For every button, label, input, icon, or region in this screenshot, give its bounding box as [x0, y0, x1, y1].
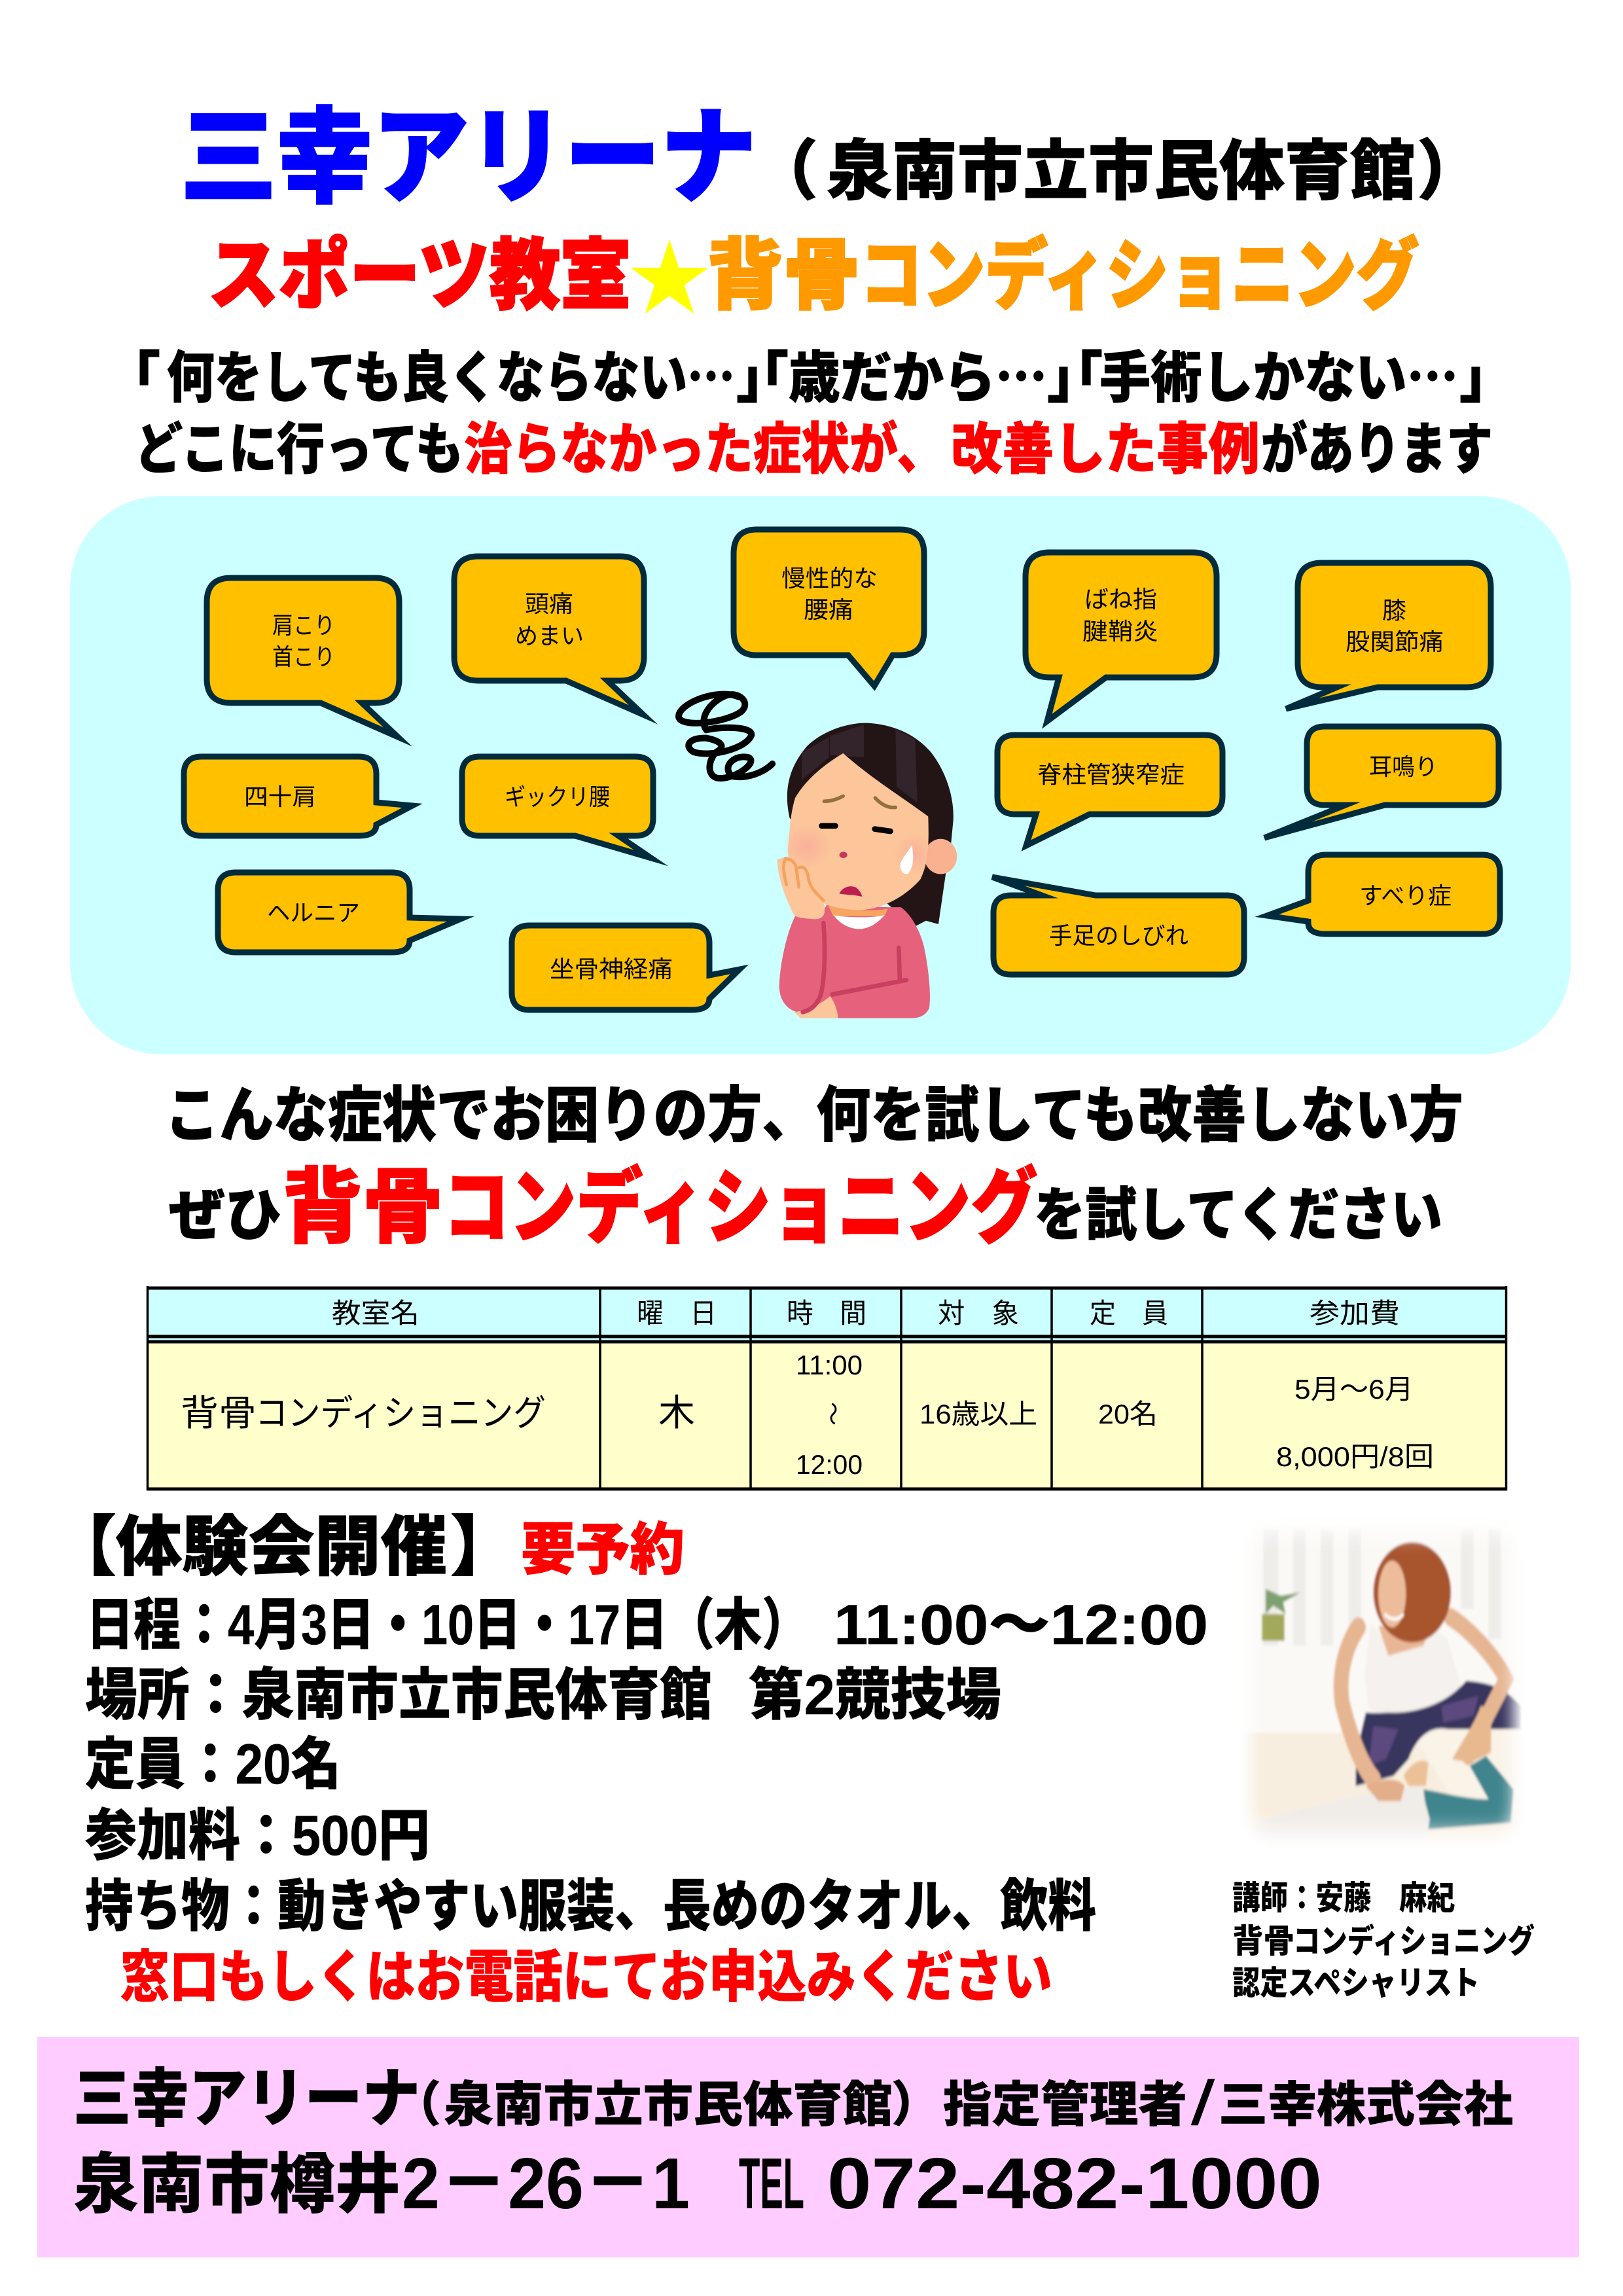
callout: frozen shoulder — [184, 757, 412, 836]
callout: sciatica — [512, 925, 740, 1010]
tag: reservation required: 要予約 — [521, 1518, 685, 1581]
icon: scribble of worry — [679, 694, 772, 778]
nose — [840, 852, 847, 858]
body values: 背骨 — [181, 1393, 257, 1433]
callout: chronic back pain: 腰痛 — [804, 596, 853, 623]
subtitle: course name: 背骨 — [707, 233, 860, 319]
callout: spondylolisthesis — [1267, 855, 1500, 934]
footer background — [37, 2037, 1579, 2257]
title: venue name: 三幸アリーナ — [181, 99, 757, 216]
instructor title line 1 — [1232, 1923, 1535, 1960]
table vertical rules — [148, 1286, 1507, 1490]
client bare foot — [1403, 1761, 1429, 1786]
place line: 第2競技場 — [749, 1664, 1001, 1727]
footer line 1: 指定管理者 — [943, 2077, 1187, 2132]
hand on cheek — [777, 857, 825, 919]
body values: 12:00 — [796, 1449, 863, 1480]
title: venue descriptor: 泉南市立市民体育館 — [827, 135, 1416, 208]
leggings — [1355, 1681, 1521, 1786]
arm left — [1341, 1627, 1374, 1780]
table body row — [147, 1342, 1507, 1489]
plant leaves — [1266, 1589, 1301, 1614]
intro line 2: どこに行っても — [135, 404, 463, 485]
callout: strained back — [462, 757, 653, 858]
hair — [1374, 1542, 1451, 1642]
callout: knee and hip joint pain: 股関節痛 — [1346, 628, 1444, 655]
place line: 場所：泉南市立市民体育館 — [85, 1664, 712, 1727]
footer line 1: / — [1191, 2068, 1215, 2138]
date line: 日程：4月3日・10日・17日（木） — [86, 1594, 809, 1657]
recommendation line 2: を試してください — [1034, 1169, 1442, 1252]
intro text — [105, 333, 1515, 485]
callout: frozen shoulder: 四十肩 — [244, 783, 316, 810]
intro line 1: 手術しかない… — [1099, 333, 1458, 414]
eyes — [821, 826, 891, 831]
footer line 2: TEL — [739, 2144, 804, 2224]
fee line: 参加料：500円 — [85, 1804, 430, 1867]
intro line 2 — [135, 404, 1493, 485]
panel: symptoms — [70, 496, 1571, 1054]
callout: numbness in limbs — [992, 877, 1244, 975]
heading: trial session: 【 — [51, 1511, 116, 1584]
footer line 1: 三幸アリーナ — [73, 2062, 420, 2134]
instructor title line 1: 背骨 — [1232, 1923, 1294, 1960]
instructor title line 2: 認定スペシャリスト — [1232, 1965, 1480, 2001]
intro line 2: 治らなかった症状が、 — [464, 404, 945, 485]
body values: ～ — [819, 1402, 846, 1426]
footer line 2: 泉南市樽井 — [73, 2148, 401, 2221]
neck — [828, 905, 888, 916]
intro line 2: があります — [1261, 404, 1493, 485]
callout: chronic back pain: 慢性的な — [781, 565, 878, 592]
collar — [834, 915, 885, 929]
callout: tinnitus: 耳鳴り — [1369, 753, 1438, 780]
heading: trial session: 体験会開催 — [116, 1511, 447, 1584]
couch — [1419, 1728, 1508, 1799]
header labels: 参加費 — [1310, 1298, 1400, 1329]
subtitle — [208, 233, 1419, 325]
body values — [181, 1350, 1434, 1480]
callout: hernia: ヘルニア — [267, 899, 360, 926]
intro line 1: 「 — [105, 333, 160, 414]
body values: 16歳以上 — [919, 1399, 1037, 1429]
footer line 2 — [73, 2144, 1322, 2224]
leggings highlights — [1368, 1696, 1478, 1766]
neck — [1378, 1626, 1429, 1656]
mouth — [840, 886, 862, 897]
client foot — [1452, 1706, 1491, 1763]
body values: 木 — [658, 1392, 695, 1433]
face — [788, 753, 929, 910]
callout: trigger finger and tenosynovitis: 腱鞘炎 — [1082, 618, 1158, 645]
callout: headache and dizziness: 頭痛 — [525, 590, 573, 617]
callout: shoulder and neck stiffness — [207, 578, 399, 737]
callout: spinal stenosis: 脊柱管狭窄症 — [1037, 761, 1185, 788]
intro line 1: 」 — [1047, 333, 1103, 414]
body values: 8,000円/8回 — [1276, 1441, 1434, 1472]
floor — [1248, 1732, 1510, 1837]
callout: numbness in limbs: 手足のしびれ — [1049, 922, 1188, 949]
callout: strained back: ギックリ腰 — [505, 783, 610, 810]
intro line 1: 「 — [1047, 333, 1103, 414]
intro line 1: 歳だから… — [789, 333, 1047, 414]
footer line 1: （ — [393, 2077, 441, 2132]
intro line 1 — [105, 333, 1515, 414]
schedule table — [147, 1286, 1507, 1490]
subtitle: course name: コンディショニング — [860, 233, 1419, 319]
body values: コンディショニング — [255, 1393, 546, 1433]
callout: chronic back pain — [734, 529, 924, 686]
callout: knee and hip joint pain — [1286, 563, 1491, 709]
recommendation text — [165, 1067, 1463, 1259]
sweater — [779, 905, 930, 1018]
callout: tinnitus — [1264, 726, 1499, 838]
callout: spondylolisthesis: すべり症 — [1359, 882, 1452, 909]
callout: spinal stenosis — [997, 735, 1222, 846]
callout: headache and dizziness: めまい — [515, 622, 584, 649]
table header row — [147, 1288, 1507, 1336]
callout: shoulder and neck stiffness: 肩こり — [272, 612, 335, 639]
footer line 2: 2－26－1 — [402, 2144, 690, 2224]
callout: trigger finger and tenosynovitis — [1026, 552, 1217, 721]
client teal leg — [1423, 1756, 1514, 1829]
recommendation line 2: ぜひ — [169, 1169, 281, 1252]
callout: shoulder and neck stiffness: 首こり — [272, 643, 335, 670]
smile — [1385, 1614, 1403, 1619]
title: venue descriptor: ） — [1417, 135, 1482, 208]
finger lines — [783, 859, 823, 901]
icon: star: ★ — [628, 234, 711, 325]
hair — [787, 723, 954, 926]
intro line 2: 改善した事例 — [951, 404, 1260, 485]
heading: trial session: 】 — [450, 1511, 516, 1584]
tear — [901, 845, 913, 874]
face — [1378, 1560, 1406, 1627]
header labels — [332, 1298, 1400, 1329]
recommendation line 2 — [169, 1141, 1442, 1259]
ear — [924, 839, 957, 874]
footer line 1 — [73, 2062, 1513, 2138]
body values: 11:00 — [796, 1350, 863, 1380]
trial session details — [51, 1511, 1208, 2009]
subtitle: sports class: スポーツ教室 — [208, 233, 631, 319]
eyebrows — [824, 796, 895, 808]
table outer and column rules — [147, 1288, 1507, 1489]
application note: 窓口もしくはお電話にてお申込みください — [120, 1946, 1052, 2009]
recommendation line 1: こんな症状でお困りの方、何を試しても改善しない方 — [165, 1067, 1463, 1154]
footer line 1: 泉南市立市民体育館 — [444, 2077, 893, 2132]
header labels: 教室名 — [332, 1298, 419, 1329]
intro line 1: 」 — [1459, 333, 1515, 414]
date line: 11:00～12:00 — [834, 1594, 1208, 1657]
recommendation line 2: 背骨 — [282, 1141, 443, 1259]
instructor hand on client — [1366, 1780, 1404, 1801]
instructor name: 講師：安藤 麻紀 — [1232, 1880, 1455, 1916]
header labels: 対 象 — [938, 1298, 1019, 1329]
instructor caption — [1232, 1880, 1535, 2001]
callout: knee and hip joint pain: 膝 — [1382, 597, 1406, 624]
intro line 1: 何をしても良くならない… — [167, 333, 735, 414]
callout: headache and dizziness — [454, 556, 644, 715]
title: venue descriptor: （ — [753, 135, 818, 208]
photo: instructor treating client — [1246, 1530, 1521, 1839]
footer line 1: ） — [891, 2077, 940, 2132]
callout: hernia — [218, 872, 461, 952]
subtitle: course name — [707, 233, 1419, 319]
title — [181, 99, 1482, 216]
header labels: 時 間 — [787, 1298, 866, 1329]
table gap strip — [147, 1338, 1507, 1340]
body values: 20名 — [1098, 1399, 1158, 1429]
sleeve lines — [803, 923, 906, 1012]
plant pot — [1262, 1614, 1285, 1641]
header labels: 曜 日 — [637, 1298, 717, 1329]
body values: 5月～6月 — [1294, 1374, 1414, 1405]
capacity line: 定員：20名 — [85, 1733, 341, 1796]
callout: trigger finger and tenosynovitis: ばね指 — [1084, 586, 1157, 613]
arm right — [1451, 1617, 1506, 1756]
tank top — [1380, 1634, 1458, 1715]
footer line 1: 三幸株式会社 — [1219, 2077, 1513, 2132]
intro line 1: 「 — [733, 333, 789, 414]
panel background — [70, 496, 1571, 1054]
blush — [895, 834, 934, 874]
intro line 1: 」 — [736, 333, 792, 414]
illustration: troubled woman — [777, 723, 957, 1018]
photo background — [1260, 1541, 1520, 1733]
client white shirt — [1256, 1786, 1430, 1843]
instructor title line 1: コンディショニング — [1293, 1923, 1535, 1960]
footer line 2: 072-482-1000 — [827, 2144, 1322, 2224]
lower hand — [794, 996, 838, 1018]
footer panel — [37, 2037, 1579, 2257]
callout: sciatica: 坐骨神経痛 — [550, 956, 673, 982]
header labels: 定 員 — [1090, 1298, 1168, 1329]
hair streaks — [802, 725, 918, 802]
belongings line: 持ち物：動きやすい服装、長めのタオル、飲料 — [85, 1875, 1096, 1938]
recommendation line 2: コンディショニング — [443, 1141, 1037, 1259]
curtains — [1263, 1529, 1501, 1645]
blush — [783, 825, 831, 868]
